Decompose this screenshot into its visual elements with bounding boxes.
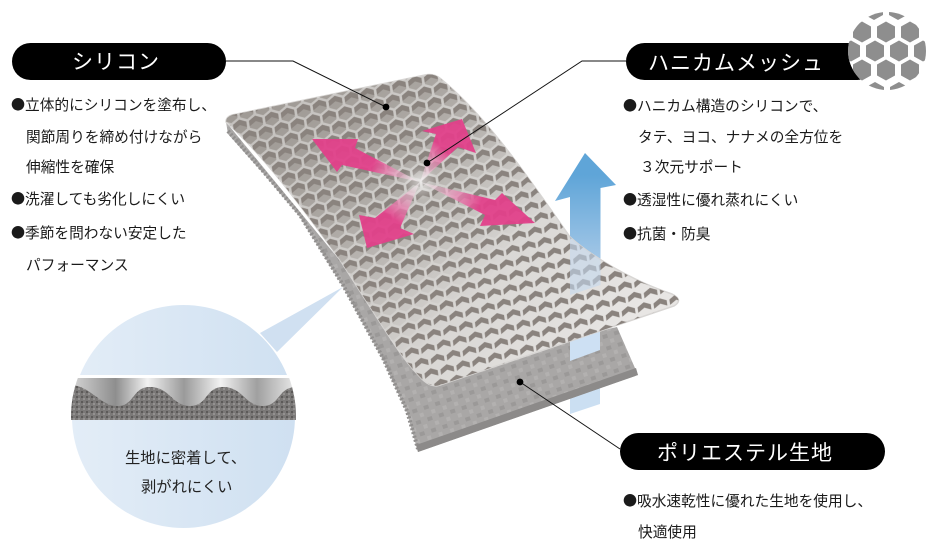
leader line: silicone [226,61,389,110]
bubble caption: 生地に密着して、 [125,450,246,467]
bubble callout: adhesion detail [70,287,343,528]
arrow centre glow [402,164,438,200]
cross-section band [70,375,298,420]
pink stretch arrows [312,119,535,248]
icon: honeycomb circle [848,12,926,90]
heading: honeycomb mesh: ハニカムメッシュ [648,52,824,75]
text block: silicone features: ●立体的にシリコンを塗布し、 [11,95,216,115]
fabric surface and side silhouette [226,122,638,452]
text block: honeycomb features: ●透湿性に優れ蒸れにくい [623,190,798,210]
text block: honeycomb features: ３次元サポート [640,159,743,176]
text block: honeycomb features [623,96,843,244]
bubble callout: adhesion detail: 剥がれにくい [141,479,232,496]
bubble pointer [260,287,343,352]
text block: honeycomb features: ●ハニカム構造のシリコンで、 [623,96,827,116]
heading: honeycomb mesh [626,43,876,80]
blue arrow window through fabric [570,328,600,361]
heading: silicone [12,43,226,80]
blue arrow seen through sheet [570,237,600,295]
leader line: honeycomb [424,61,626,166]
text block: silicone features: パフォーマンス [26,257,129,274]
heading: polyester fabric: ポリエステル生地 [657,442,833,465]
heading: polyester fabric [620,433,885,470]
fabric ribbed outer edge [228,131,418,449]
text block: polyester features: 快適使用 [638,524,697,541]
text block: polyester features [623,491,872,541]
fabric front edge [416,368,638,452]
bubble circle [72,305,295,528]
text block: polyester features: ●吸水速乾性に優れた生地を使用し、 [623,491,872,511]
silicone honeycomb sheet [220,70,690,390]
blue upward arrow [555,153,616,270]
text block: silicone features: ●季節を問わない安定した [11,223,187,243]
arrow: down-left [359,182,420,248]
text block: honeycomb features: タテ、ヨコ、ナナメの全方位を [638,129,843,146]
heading: silicone: シリコン [72,51,160,74]
text block: silicone features: 伸縮性を確保 [26,159,114,176]
text block: silicone features: ●洗濯しても劣化しにくい [11,189,185,209]
arrow: up-right [420,119,476,182]
text block: silicone features [11,95,216,274]
arrow: up-left [312,139,420,182]
sheet base [226,74,679,386]
polyester fabric layer [226,122,638,452]
arrow: down-right [420,182,535,226]
blue arrow lower shaft behind fabric [570,340,600,414]
text block: silicone features: 関節周りを締め付けながら [26,129,202,146]
leader line: polyester [517,379,620,449]
text block: honeycomb features: ●抗菌・防臭 [623,224,711,244]
honeycomb pattern [220,70,690,390]
